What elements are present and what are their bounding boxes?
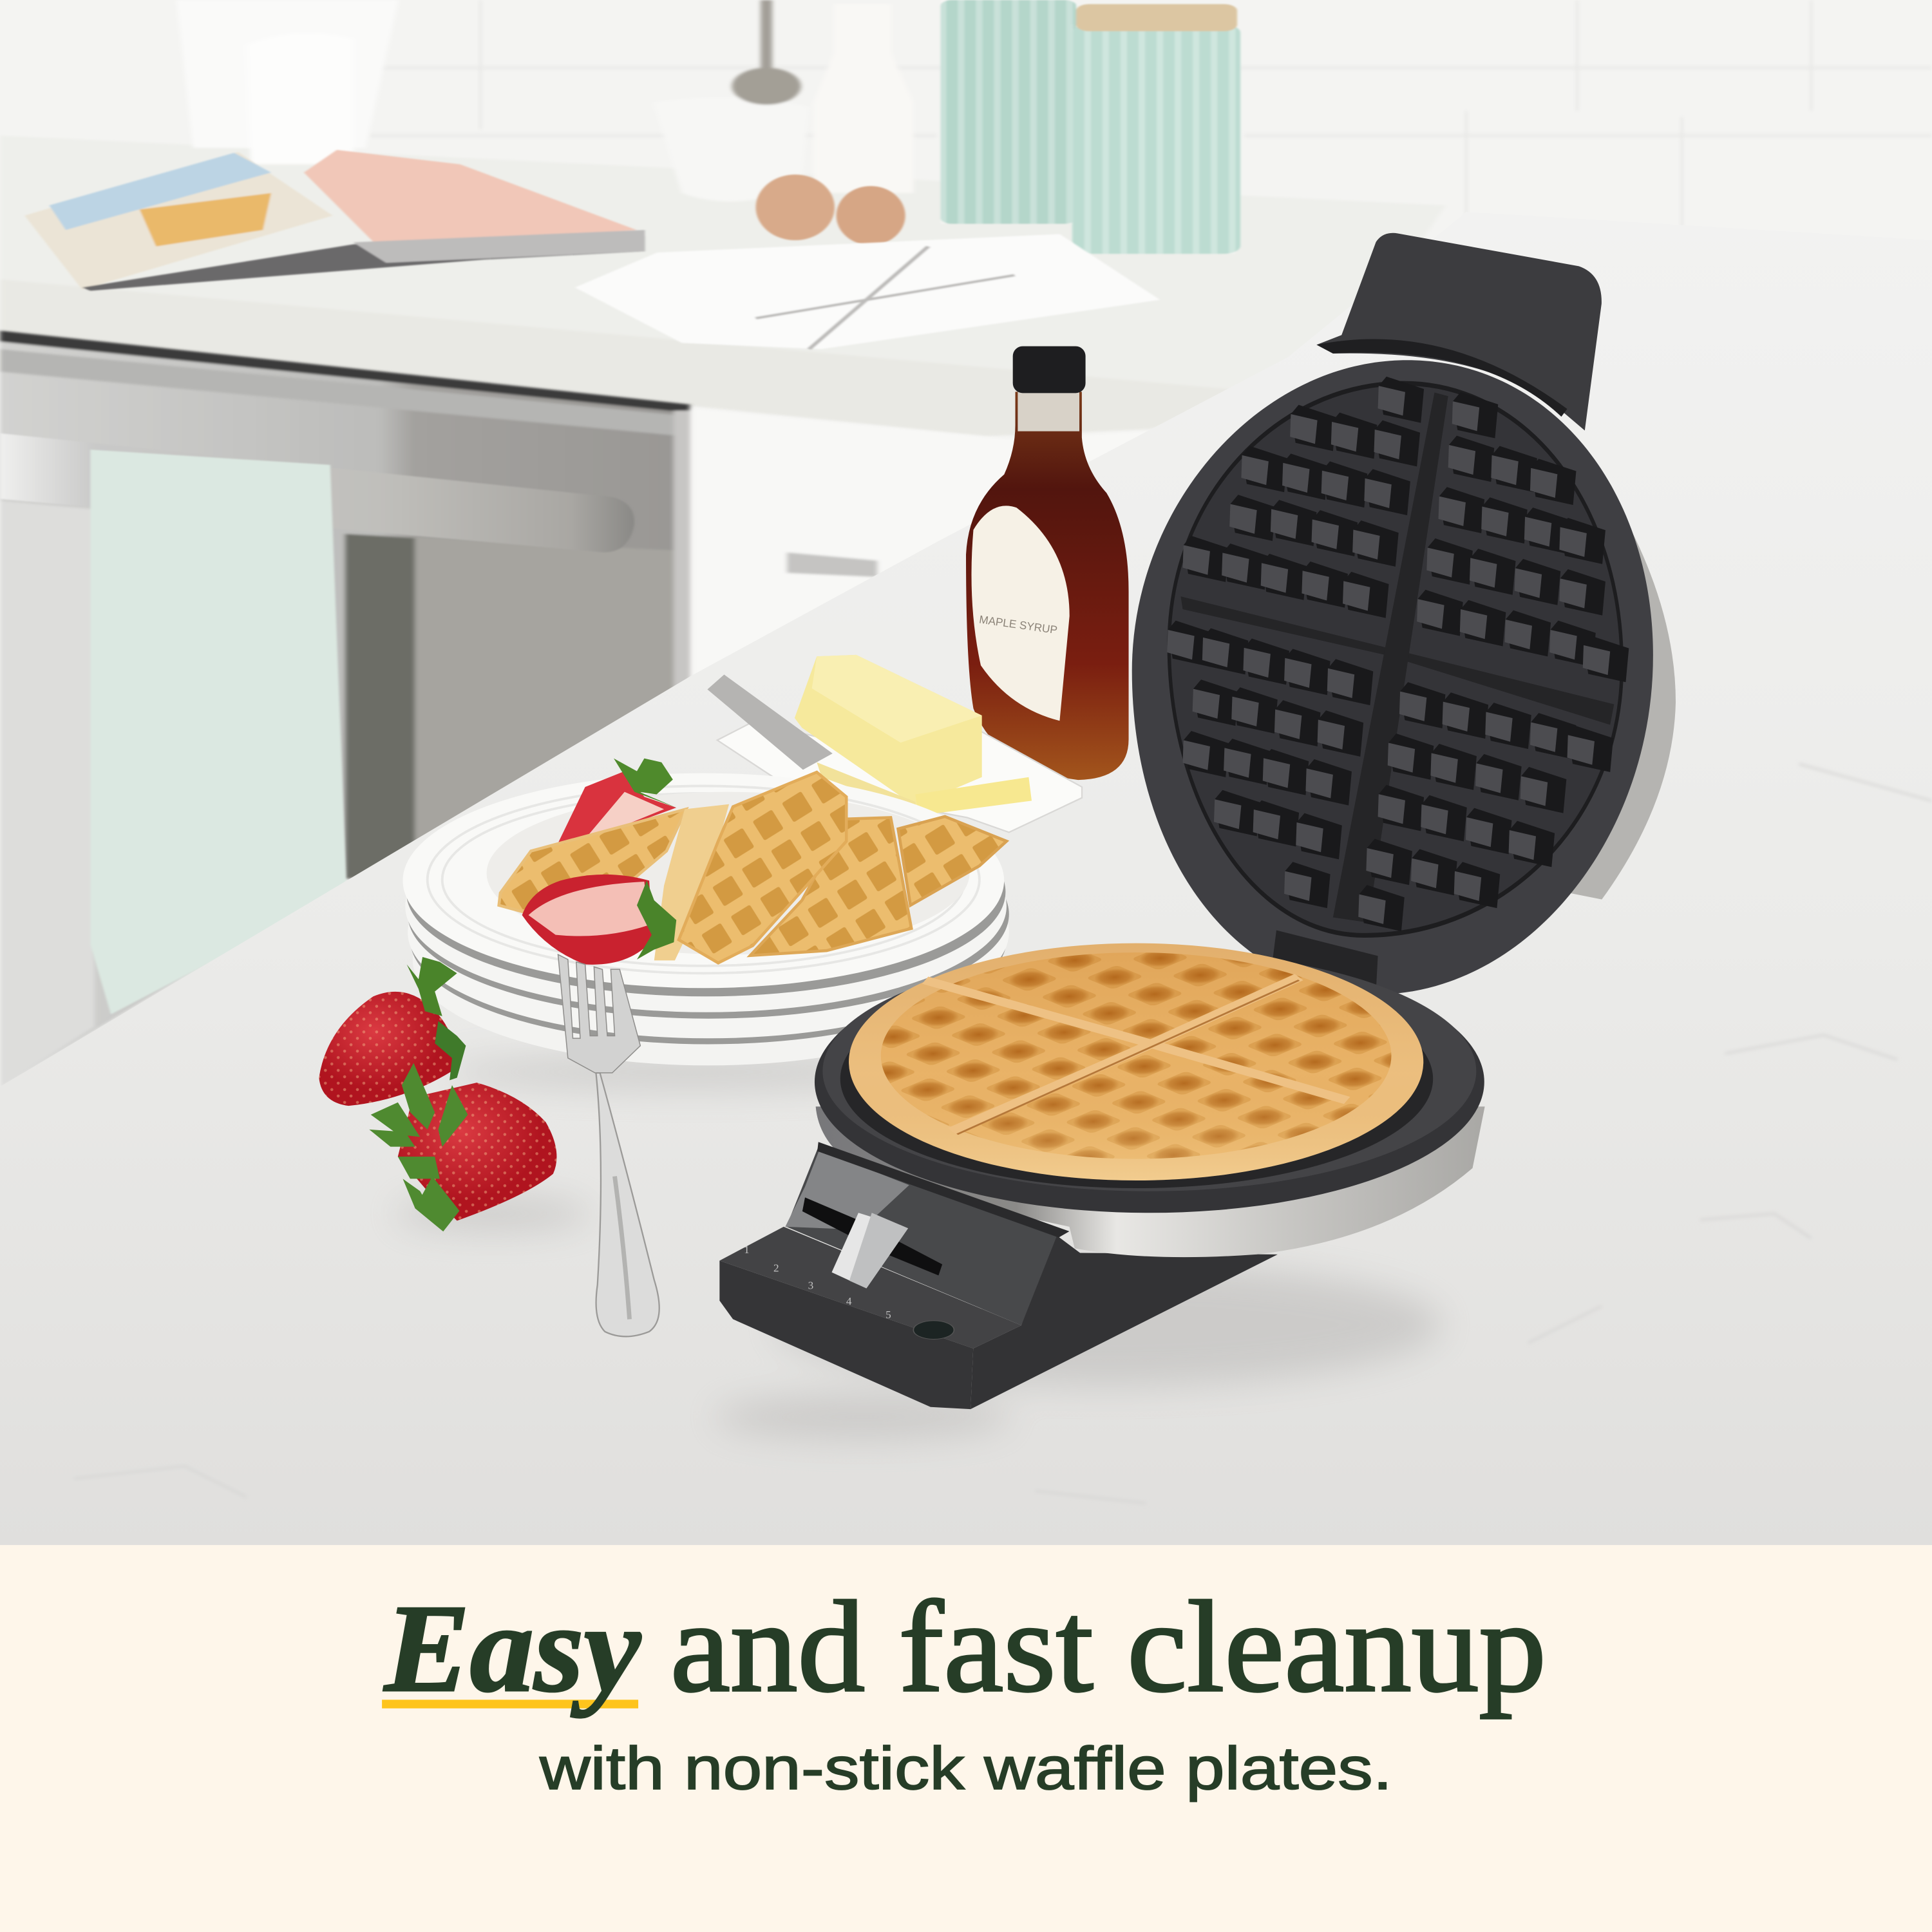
plate waffle squares <box>1167 377 1629 931</box>
slider control panel <box>786 1144 1059 1325</box>
waffle piece left <box>499 804 729 960</box>
eggs <box>756 175 905 245</box>
slider slot <box>802 1197 942 1275</box>
dishwasher lower panel <box>345 534 674 904</box>
butter dish <box>717 722 1082 832</box>
fork <box>558 954 659 1336</box>
strawberry on top of waffles <box>557 759 676 845</box>
control top plane <box>719 1227 1021 1349</box>
temperature numbers 1-5 <box>744 1244 891 1321</box>
control front side <box>719 1260 973 1409</box>
temperature numbers 1-5: 4 <box>846 1295 852 1307</box>
slider panel silver section <box>785 1150 909 1230</box>
photo background: kitchen wall <box>0 0 1932 1545</box>
striped ceramic jars <box>941 0 1240 254</box>
power indicator <box>913 1321 954 1339</box>
dishwasher dark reflection <box>345 534 415 879</box>
slider knob <box>831 1213 908 1289</box>
waffle piece center <box>679 772 846 963</box>
hanging mint towel <box>90 450 346 1014</box>
waffle piece right center <box>750 817 911 956</box>
butter knife <box>707 675 833 770</box>
temperature numbers 1-5: 1 <box>744 1244 750 1256</box>
heading: and fast cleanup <box>670 1574 1546 1719</box>
lid hinge <box>1271 930 1378 992</box>
foreground tableware group <box>319 655 1082 1336</box>
lid outer rim <box>1132 360 1653 994</box>
bowl, spoon and milk bottle <box>653 0 913 202</box>
marble veins <box>74 764 1932 1503</box>
base plate <box>840 969 1433 1188</box>
waffle maker open lid <box>1132 233 1653 994</box>
stack of white plates <box>402 773 1009 1065</box>
waffle maker base <box>719 943 1485 1409</box>
base rim highlight <box>822 951 1476 1191</box>
shadows on counter <box>394 1055 1442 1439</box>
maple syrup bottle <box>966 346 1129 780</box>
heading underline accent <box>382 1700 638 1709</box>
plate cross grooves <box>1180 393 1614 922</box>
back counter <box>0 135 1446 436</box>
cups on back counter <box>176 0 399 164</box>
strawberry left <box>319 957 466 1106</box>
cooked round waffle <box>849 943 1423 1180</box>
heading: Easy <box>383 1579 641 1718</box>
stainless steel body <box>816 1106 1485 1257</box>
housing top rim <box>817 1142 1069 1238</box>
cut strawberry on plate <box>522 875 676 965</box>
dishwasher handle <box>0 433 634 553</box>
temperature numbers 1-5: 5 <box>886 1309 891 1321</box>
subheading: with non-stick waffle plates. <box>539 1734 1392 1802</box>
strawberry front <box>369 1063 556 1231</box>
non-stick waffle plate <box>1169 383 1622 935</box>
wall tiles <box>370 0 1932 228</box>
base rim <box>815 951 1484 1213</box>
temperature numbers 1-5: 3 <box>808 1279 813 1291</box>
waffle piece far right <box>898 817 1007 905</box>
folded napkin with fork <box>575 234 1160 349</box>
island marble countertop <box>0 212 1932 1545</box>
open cookbook <box>24 150 645 290</box>
maple syrup bottle: MAPLE SYRUP <box>978 612 1058 636</box>
waffle maker steel back of lid <box>1540 468 1676 900</box>
lid handle <box>1316 233 1602 431</box>
temperature numbers 1-5: 2 <box>773 1262 779 1274</box>
bottom caption band <box>0 1545 1932 1932</box>
butter block <box>795 655 1032 815</box>
background objects blurred <box>0 0 1446 1088</box>
white cabinet <box>694 409 1150 677</box>
lid handle lip <box>1316 339 1567 417</box>
control housing body <box>971 1233 1278 1409</box>
dishwasher <box>0 330 690 1088</box>
